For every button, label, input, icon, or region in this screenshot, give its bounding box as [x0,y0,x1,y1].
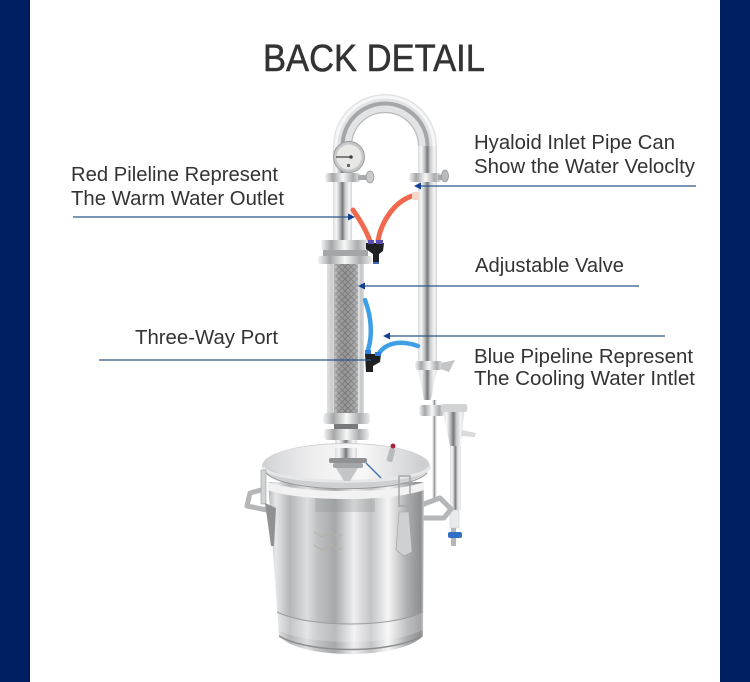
product photo: stainless distiller [247,97,476,654]
upper left clamp [325,171,374,183]
lower three-way port [365,350,381,372]
callout: blue pipeline: The Cooling Water Intlet [474,368,695,390]
right latch [396,476,412,556]
title: BACK DETAIL [263,38,485,80]
right navy side band [720,0,750,682]
upper black Y connector [366,240,384,264]
thin drain tube [432,400,437,498]
pot lid [262,443,430,489]
left navy side band [0,0,30,682]
callout: inlet pipe [414,132,696,190]
lower cone under condenser [418,370,437,400]
callout: red pipeline: The Warm Water Outlet [71,188,284,210]
callout: inlet pipe: Hyaloid Inlet Pipe Can [474,132,675,154]
lower condenser clamps [415,360,467,416]
red warm water pipes [353,192,419,241]
condensate receiver [443,412,476,546]
red pressure valve [386,447,396,463]
callout: adjustable valve [358,255,639,290]
blue cooling water pipes [365,300,418,355]
callout: three-way port: Three-Way Port [135,327,278,349]
callout: blue pipeline [383,332,695,390]
callout: red pipeline: Red Pileline Represent [71,164,278,186]
callout: inlet pipe: Show the Water Veloclty [474,156,695,178]
lid base fitting [335,448,357,458]
packed column [318,240,372,455]
side handles [247,489,451,518]
left latch [261,470,276,546]
upper right clamp [409,170,448,182]
callout: red pipeline [71,164,355,220]
pot logo marks [314,531,342,550]
callout: blue pipeline: Blue Pipeline Represent [474,346,693,368]
thermometer gauge [334,142,364,172]
callout: adjustable valve: Adjustable Valve [475,255,624,277]
pot body [268,482,424,654]
right condenser tube and arch [333,97,437,498]
